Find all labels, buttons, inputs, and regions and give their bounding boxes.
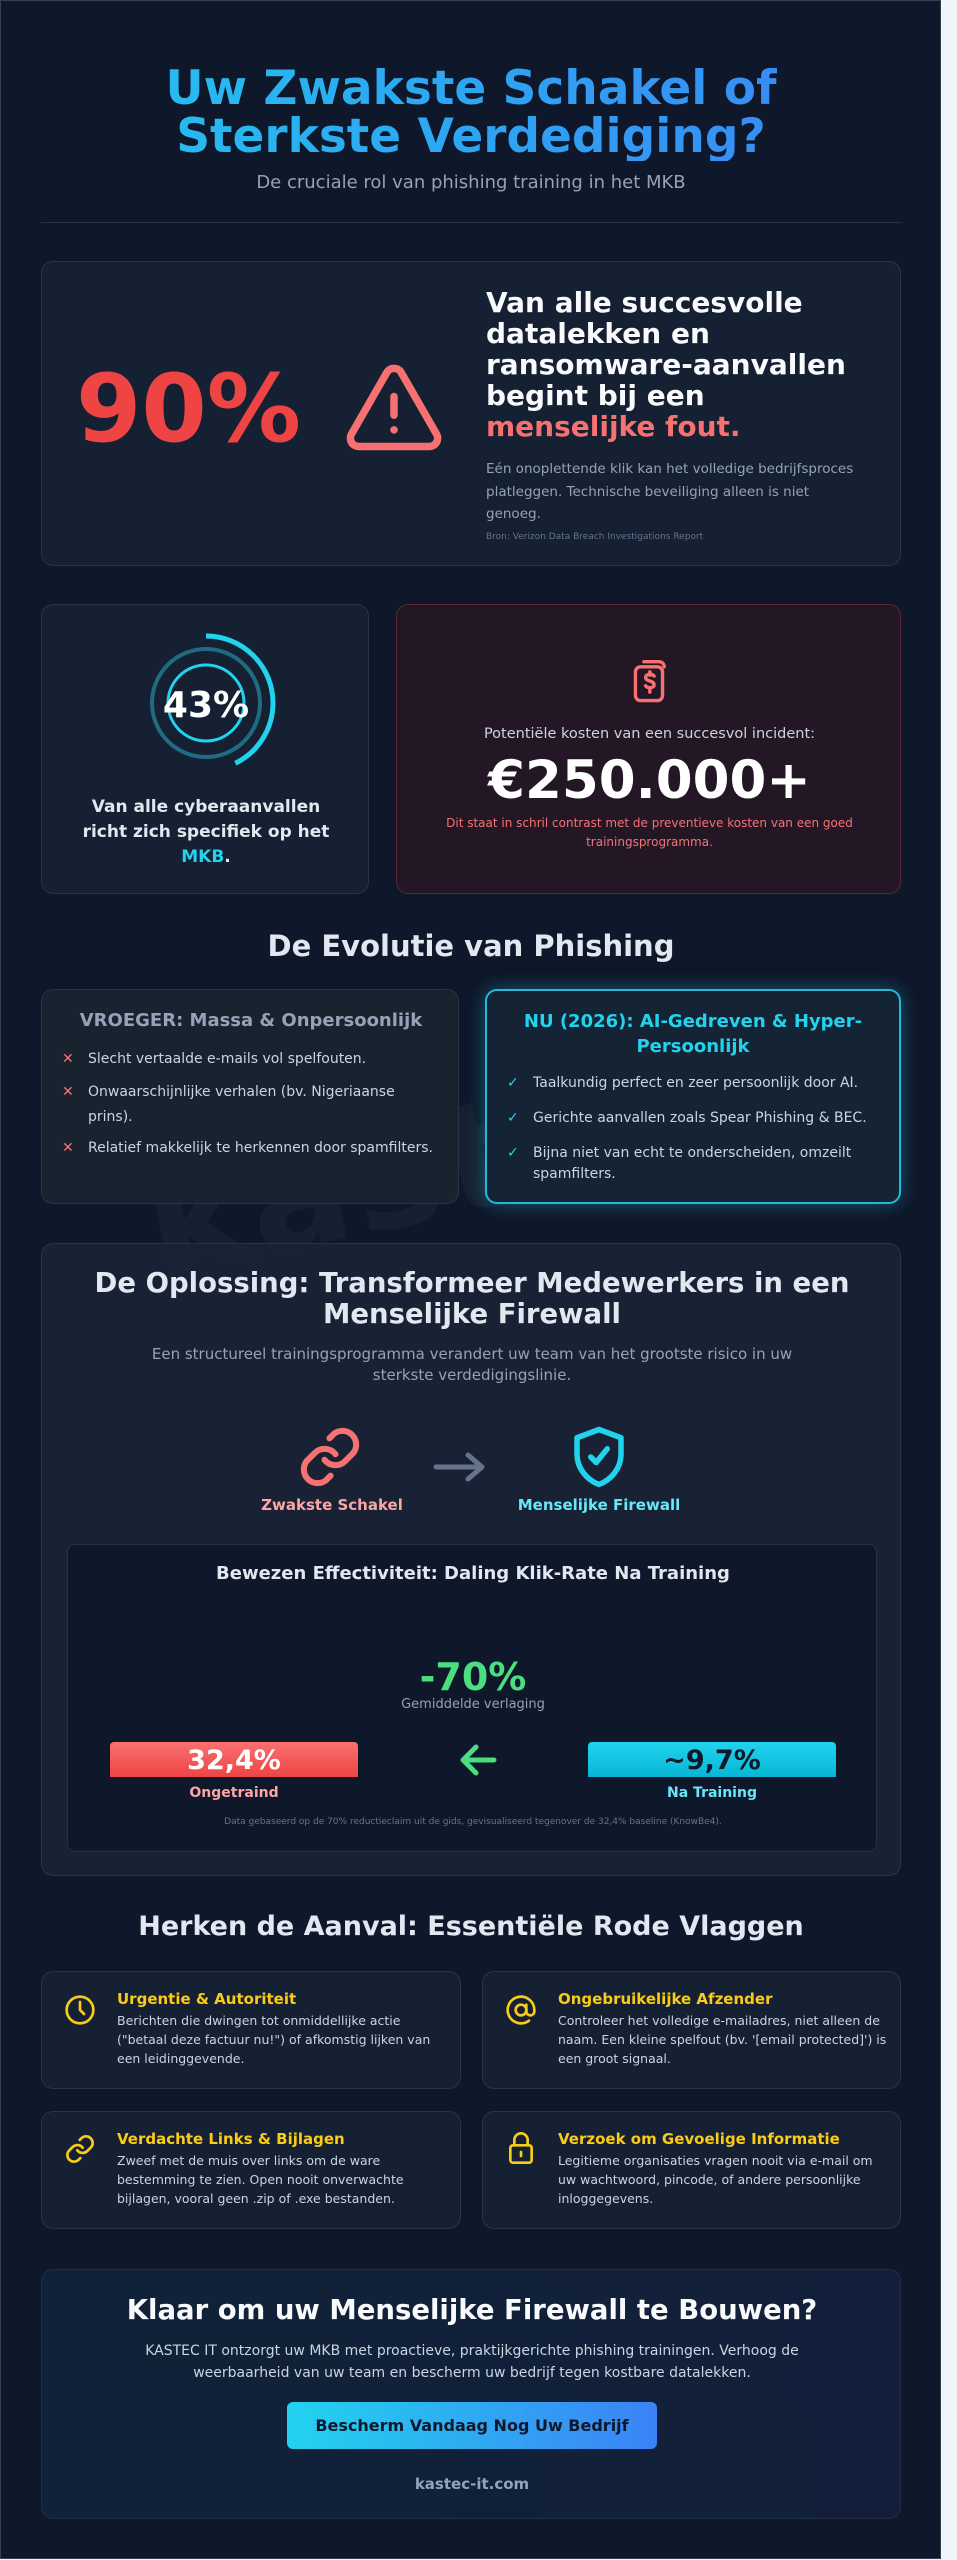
icon: money — [634, 660, 666, 702]
panel: flag links: Zweef met de muis over links om de ware bestemming te zien. Open nooit onverwachte bijlagen, vooral geen .zip of .exe bestanden. — [117, 2153, 404, 2206]
text: contrast note: Dit staat in schril contrast met de preventieve kosten van een goed trainingsprogramma. — [446, 816, 853, 849]
list: old traits: Relatief makkelijk te herkennen door spamfilters. — [88, 1140, 433, 1156]
panel: flag sensitive info: Legitieme organisaties vragen nooit via e-mail om uw wachtwoord, pincode, of andere persoonlijke inloggegevens. — [558, 2153, 873, 2206]
panel: oplossing: Een structureel trainingsprogramma verandert uw team van het grootste risico in uw sterkste verdedigingslinie. — [152, 1345, 792, 1384]
bar: trained — [588, 1742, 836, 1777]
panel: vroeger — [41, 989, 459, 1204]
panel: flag urgency — [41, 1971, 461, 2089]
list: new traits: Taalkundig perfect en zeer persoonlijk door AI. — [533, 1075, 858, 1091]
panel: 43% SMB — [41, 604, 369, 894]
text block: human error — [486, 286, 853, 542]
list: old traits — [62, 1051, 433, 1156]
stat: -70%: -70% — [420, 1655, 526, 1699]
title — [1, 65, 941, 161]
text block: human error: platleggen. Technische beveiliging alleen is niet — [486, 484, 809, 500]
big number 90%: 90% — [76, 355, 301, 464]
panel: CTA: KASTEC IT ontzorgt uw MKB met proactieve, praktijkgerichte phishing trainingen. Verhoog de weerbaarheid van uw team en bescherm uw bedrijf tegen kostbare datalekken. — [145, 2343, 799, 2381]
panel: oplossing: Menselijke Firewall — [518, 1496, 680, 1514]
panel: flag links: Verdachte Links & Bijlagen — [117, 2130, 345, 2148]
panel: nu: NU (2026): AI-Gedreven & Hyper-Persoonlijk — [524, 1011, 862, 1057]
list: new traits — [507, 1075, 867, 1182]
text block: human error: Bron: Verizon Data Breach Investigations Report — [486, 532, 703, 542]
text: SMB targeted: Van alle cyberaanvallen — [92, 797, 320, 817]
heading: solution: De Oplossing: Transformeer Medewerkers in een Menselijke Firewall — [95, 1267, 849, 1330]
icon: ring chart 43% — [150, 634, 276, 766]
chart: click rate: Data gebaseerd op de 70% reductieclaim uit de gids, gevisualiseerd tegenover de 32,4% baseline (KnowBe4). — [224, 1817, 722, 1827]
panel: oplossing — [41, 1243, 901, 1876]
chart: click rate: Gemiddelde verlaging — [401, 1697, 545, 1712]
heading: evolution: De Evolutie van Phishing — [268, 929, 674, 963]
button: Bescherm Vandaag Nog Uw Bedrijf — [315, 2416, 629, 2435]
text: SMB targeted: richt zich specifiek op het — [83, 822, 329, 842]
list: old traits: ✕ — [62, 1051, 74, 1067]
text block: human error: genoeg. — [486, 506, 541, 522]
panel: flag sender: Ongebruikelijke Afzender — [558, 1990, 772, 2008]
list: new traits: ✓ — [507, 1145, 519, 1161]
panel: CTA: Klaar om uw Menselijke Firewall te Bouwen? — [127, 2294, 817, 2326]
text block: human error: Eén onoplettende klik kan het volledige bedrijfsproces — [486, 461, 853, 477]
panel: flag sensitive info — [482, 2111, 901, 2229]
list: old traits: ✕ — [62, 1084, 74, 1100]
list: new traits: Gerichte aanvallen zoals Spear Phishing & BEC. — [533, 1110, 867, 1126]
text block: human error: Van alle succesvolle datalekken en ransomware-aanvallen begint bij een menselijke fout. — [486, 286, 846, 443]
list: old traits: Slecht vertaalde e-mails vol spelfouten. — [88, 1051, 366, 1067]
list: old traits: Onwaarschijnlijke verhalen (bv. Nigeriaanse prins). — [88, 1084, 395, 1125]
panel: flag sensitive info: Verzoek om Gevoelige Informatie — [558, 2130, 840, 2148]
panel: flag links — [41, 2111, 461, 2229]
title: Uw Zwakste Schakel of — [165, 61, 777, 116]
list: old traits: ✕ — [62, 1140, 74, 1156]
panel: CTA — [41, 2269, 901, 2519]
chart: click rate: Bewezen Effectiviteit: Daling Klik-Rate Na Training — [216, 1563, 730, 1584]
bar: trained: ~9,7% — [663, 1745, 761, 1776]
icon: warning triangle — [346, 364, 442, 450]
panel: CTA: kastec-it.com — [415, 2475, 529, 2493]
watermark: kastec — [129, 1023, 729, 1313]
panel: 90% stat — [41, 261, 901, 566]
arrow: left green — [460, 1744, 496, 1776]
panel: flag urgency: Urgentie & Autoriteit — [117, 1990, 296, 2008]
chart: click rate: Na Training — [667, 1785, 757, 1801]
chart: click rate: Ongetraind — [189, 1785, 279, 1801]
panel: flag urgency: Berichten die dwingen tot onmiddellijke actie ("betaal deze factuur nu!") of afkomstig lijken van een leidinggevende. — [117, 2013, 430, 2066]
title: Sterkste Verdediging? — [176, 109, 766, 164]
subtitle: De cruciale rol van phishing training in het MKB — [256, 172, 686, 193]
icon: broken link — [300, 1428, 360, 1486]
heading: red flags: Herken de Aanval: Essentiële Rode Vlaggen — [138, 1911, 804, 1942]
text: cost label: Potentiële kosten van een succesvol incident: — [484, 726, 815, 742]
panel: flag sender: Controleer het volledige e-mailadres, niet alleen de naam. Een kleine spelfout (bv. '[email protected]') is een groot signaal. — [558, 2013, 886, 2066]
bar: untrained: 32,4% — [187, 1745, 281, 1776]
text: SMB targeted — [83, 797, 329, 867]
button — [287, 2402, 657, 2449]
panel: 43% SMB: 43% — [163, 685, 249, 726]
chart: click rate — [67, 1544, 877, 1852]
panel: vroeger: VROEGER: Massa & Onpersoonlijk — [80, 1010, 422, 1031]
list: new traits: Bijna niet van echt te onderscheiden, omzeilt spamfilters. — [533, 1145, 851, 1182]
icon: shield check — [574, 1426, 624, 1488]
list: new traits: ✓ — [507, 1110, 519, 1126]
text: SMB targeted: MKB. — [181, 847, 231, 867]
panel: cost — [396, 604, 901, 894]
list: new traits: ✓ — [507, 1075, 519, 1091]
big number cost: €250.000+ — [488, 750, 811, 811]
arrow: right — [434, 1452, 484, 1482]
panel: flag sender — [482, 1971, 901, 2089]
panel: oplossing: Zwakste Schakel — [261, 1496, 403, 1514]
bar: untrained — [110, 1742, 358, 1777]
panel: nu — [485, 989, 901, 1204]
